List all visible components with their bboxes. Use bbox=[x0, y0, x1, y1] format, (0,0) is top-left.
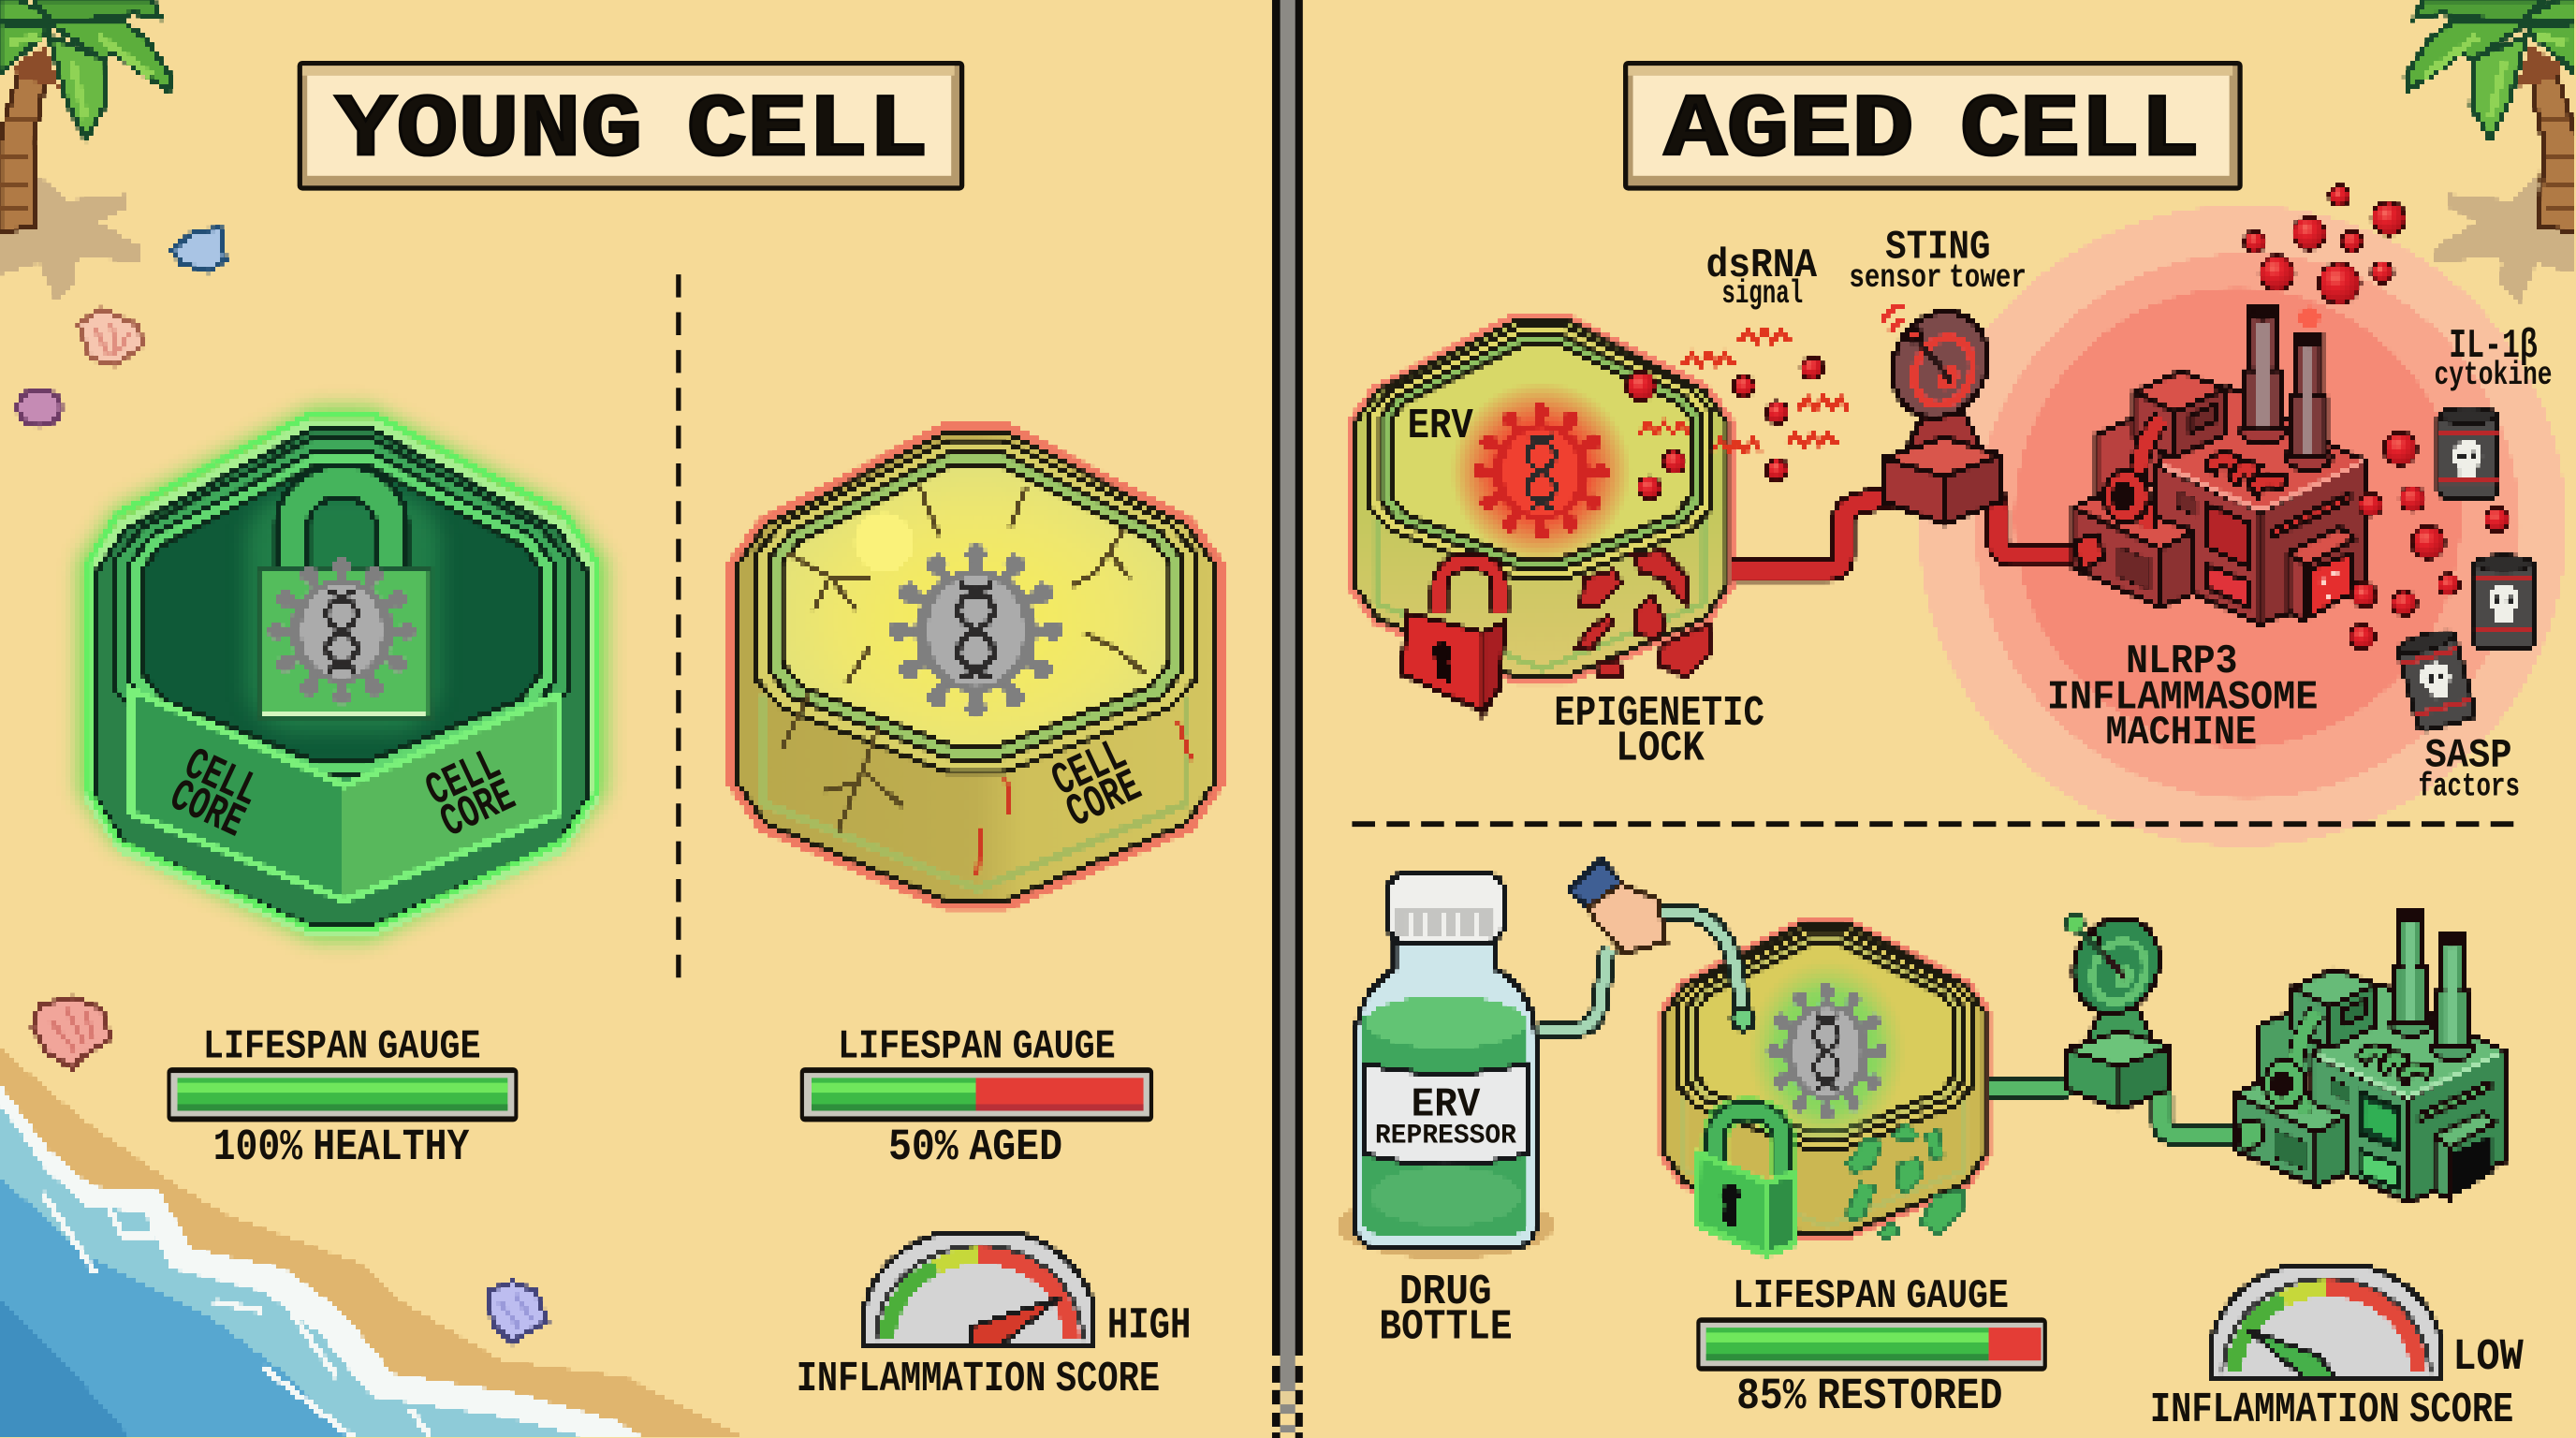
treated cell with green virus glow bbox=[1666, 923, 1984, 1239]
cell core labels young right: CELL bbox=[418, 739, 509, 818]
label: epigenetic lock: LOCK bbox=[1616, 725, 1705, 773]
cell core labels young left bbox=[162, 739, 267, 849]
lifespan gauge: young: 100% HEALTHY bbox=[213, 1123, 470, 1173]
gray virus core bbox=[888, 544, 1063, 718]
red pipes bbox=[1734, 488, 2085, 570]
lifespan gauge: restored bbox=[1696, 1273, 2047, 1422]
title: young cell bbox=[298, 61, 964, 191]
open red epigenetic lock bbox=[1401, 562, 1505, 712]
bottle label text: REPRESSOR bbox=[1375, 1120, 1516, 1152]
inflammation gauge low bbox=[2211, 1265, 2441, 1379]
STING sensor tower bbox=[1876, 296, 2005, 524]
green sensor tower bbox=[2058, 904, 2174, 1109]
cell core labels aged: CELL bbox=[1045, 728, 1134, 808]
hand and sleeve bbox=[1569, 859, 1666, 953]
icon: right palm tree bbox=[2406, 0, 2576, 302]
cracks bbox=[781, 485, 1145, 831]
feeding tube and bulb bbox=[1538, 912, 1754, 1030]
lifespan gauge: aged bbox=[800, 1023, 1153, 1173]
icon: left palm tree bbox=[0, 0, 170, 302]
cell core labels young right bbox=[418, 739, 523, 849]
label: NLRP3 inflammasome machine: MACHINE bbox=[2106, 710, 2257, 756]
icon: shells on the beach bbox=[18, 228, 547, 1343]
cell core labels aged bbox=[1045, 728, 1149, 840]
cytokine balls bbox=[2245, 185, 2510, 649]
label: SASP factors: SASP bbox=[2425, 733, 2512, 780]
green padlock with virus bbox=[246, 481, 440, 731]
dashed divider horizontal bbox=[1352, 822, 2522, 826]
label: STING sensor tower: sensor tower bbox=[1849, 259, 2027, 297]
inflammation label low: LOW bbox=[2452, 1333, 2524, 1383]
title: young cell: YOUNG bbox=[335, 81, 642, 182]
label: SASP factors bbox=[2419, 733, 2520, 805]
lifespan gauge: aged: 50% AGED bbox=[888, 1123, 1062, 1173]
lifespan gauge: aged: LIFESPAN GAUGE bbox=[838, 1023, 1116, 1070]
bottle label text: ERV bbox=[1412, 1082, 1481, 1129]
label: dsRNA signal: signal bbox=[1721, 275, 1803, 313]
cell core labels young left: CORE bbox=[162, 770, 252, 849]
inflammation label high: INFLAMMATION SCORE bbox=[797, 1355, 1160, 1403]
front band with neon outline bbox=[131, 690, 559, 901]
red inflammation halo bbox=[1919, 205, 2566, 846]
title: aged cell: AGED bbox=[1664, 81, 1914, 182]
aged cell: cracked yellow hexagon bbox=[736, 433, 1216, 901]
label: NLRP3 inflammasome machine: NLRP3 bbox=[2126, 638, 2237, 685]
bottle label text bbox=[1375, 1082, 1516, 1152]
cell core labels aged: CORE bbox=[1059, 760, 1149, 840]
label: epigenetic lock bbox=[1554, 689, 1764, 773]
screen and door glow bbox=[2208, 505, 2249, 567]
lifespan gauge: restored: 85% RESTORED bbox=[1736, 1372, 2002, 1422]
lifespan gauge: young: LIFESPAN GAUGE bbox=[203, 1023, 481, 1070]
SASP barrel 2 bbox=[2474, 555, 2533, 649]
inflammation label high: HIGH bbox=[1107, 1302, 1191, 1352]
cell core labels young left: CELL bbox=[176, 739, 267, 818]
red signal particles bbox=[1627, 358, 1822, 500]
label: dsRNA signal bbox=[1706, 242, 1818, 313]
label: ERV: ERV bbox=[1408, 402, 1473, 450]
broken wall shards bbox=[1577, 550, 1710, 677]
inflammation label high bbox=[797, 1302, 1191, 1403]
label: SASP factors: factors bbox=[2419, 768, 2520, 805]
label: NLRP3 inflammasome machine bbox=[2047, 638, 2318, 756]
green pipes bbox=[1988, 1071, 2256, 1136]
title: young cell: CELL bbox=[687, 81, 929, 182]
dsRNA signal squiggles bbox=[1640, 330, 1848, 452]
label: dsRNA signal: dsRNA bbox=[1706, 242, 1818, 289]
label: STING sensor tower: STING bbox=[1885, 225, 1990, 271]
SASP barrel 3 tipped bbox=[2395, 626, 2477, 732]
label: STING sensor tower bbox=[1849, 225, 2027, 297]
label: drug bottle: BOTTLE bbox=[1379, 1303, 1513, 1352]
beach and ocean corner bbox=[0, 1049, 744, 1438]
closed green lock bbox=[1696, 1110, 1794, 1255]
label: epigenetic lock: EPIGENETIC bbox=[1554, 689, 1764, 738]
label: drug bottle: DRUG bbox=[1399, 1268, 1492, 1316]
SASP barrel 1 bbox=[2438, 407, 2497, 498]
young cell: glowing green hexagon bbox=[79, 407, 607, 940]
cell core labels young right: CORE bbox=[432, 770, 523, 849]
inflammation label low bbox=[2150, 1333, 2524, 1434]
label: NLRP3 inflammasome machine: INFLAMMASOME bbox=[2047, 674, 2318, 721]
central divider bbox=[1272, 0, 1303, 1438]
title: aged cell bbox=[1623, 61, 2243, 191]
aged ERV cell with red glowing virus bbox=[1355, 319, 1727, 678]
repaired green shards bbox=[1847, 1123, 1965, 1239]
lifespan gauge: young bbox=[167, 1023, 518, 1173]
title: aged cell: CELL bbox=[1960, 81, 2200, 182]
label: IL-1 beta cytokine: IL-1β bbox=[2449, 323, 2538, 370]
dashed divider vertical bbox=[677, 274, 680, 986]
label: drug bottle bbox=[1379, 1268, 1513, 1352]
green factory bbox=[2235, 909, 2505, 1202]
NLRP3 inflammasome factory bbox=[2073, 306, 2365, 624]
lifespan gauge: restored: LIFESPAN GAUGE bbox=[1733, 1273, 2009, 1320]
green door and screen bbox=[2359, 1091, 2400, 1151]
inflammation gauge high bbox=[864, 1232, 1094, 1345]
label: IL-1 beta cytokine bbox=[2435, 323, 2553, 394]
drug bottle bbox=[1338, 873, 1554, 1258]
